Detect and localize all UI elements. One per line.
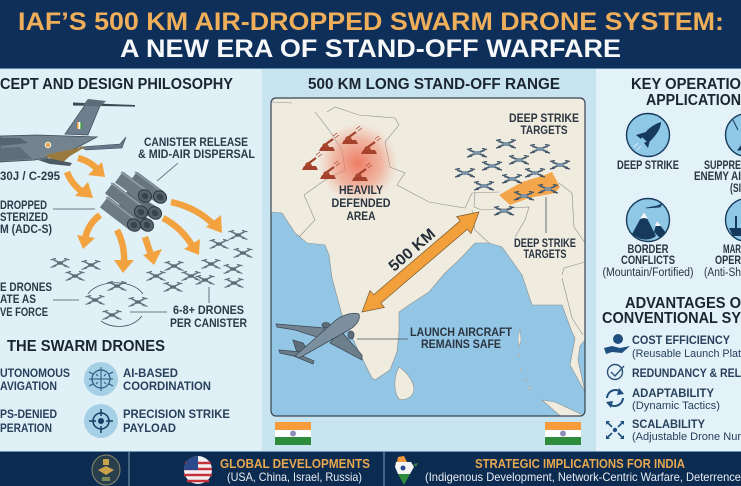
feature text: precision strike payload: PAYLOAD bbox=[123, 421, 176, 435]
target region bbox=[499, 172, 560, 205]
label: border conflicts bbox=[602, 244, 694, 279]
label: launch aircraft remains safe bbox=[410, 327, 512, 351]
drone swarm bbox=[50, 230, 252, 326]
icon: indian flag left bbox=[275, 422, 311, 445]
label: deep strike targets upper: TARGETS bbox=[520, 125, 568, 137]
title line two: A NEW ERA OF STAND-OFF WARFARE bbox=[120, 35, 621, 63]
icon: cost efficiency hand and coin bbox=[604, 334, 630, 354]
advantage: adaptability: ADAPTABILITY bbox=[632, 386, 714, 400]
label: drones per canister bbox=[170, 303, 247, 330]
label: canister release: & MID-AIR DISPERSAL bbox=[138, 147, 255, 161]
panel: stand-off range map bbox=[271, 76, 585, 445]
feature: autonomous navigation bbox=[0, 366, 70, 393]
label: deep strike: DEEP STRIKE bbox=[617, 160, 679, 172]
label: air-dropped canisterized system: DROPPED bbox=[0, 198, 47, 212]
text: global developments bbox=[220, 456, 370, 484]
label: aircraft: 30J / C-295 bbox=[0, 169, 60, 183]
label: canister release: CANISTER RELEASE bbox=[144, 135, 248, 149]
feature: gps-denied operation bbox=[0, 407, 57, 435]
footer bar bbox=[0, 451, 741, 486]
feature: autonomous navigation: AVIGATION bbox=[0, 379, 57, 393]
panel: key operational applications bbox=[602, 76, 741, 443]
label: maritime operations bbox=[704, 244, 741, 279]
icon: india map in tricolor bbox=[395, 456, 418, 485]
arrow: 500 km range bbox=[362, 212, 479, 312]
text: global developments: (USA, China, Israel, Russia) bbox=[227, 470, 362, 484]
advantage: cost efficiency: COST EFFICIENCY bbox=[632, 333, 730, 347]
label: deep strike targets lower: DEEP STRIKE bbox=[514, 238, 576, 250]
label: drones operate as cohesive force bbox=[0, 280, 52, 319]
arrows: canister release and dispersal bbox=[67, 158, 222, 273]
label: deep strike targets lower bbox=[514, 238, 576, 261]
label: heavily defended area: HEAVILY bbox=[339, 185, 383, 197]
label: drones operate as cohesive force: E DRONES bbox=[0, 280, 52, 294]
title line one: IAF’S 500 KM AIR-DROPPED SWARM DRONE SYSTEM: bbox=[18, 8, 724, 36]
text: strategic implications for india: STRATEGIC IMPLICATIONS FOR INDIA bbox=[475, 456, 686, 471]
icon: indian flag right bbox=[545, 422, 581, 445]
panel: concept and design philosophy bbox=[0, 76, 255, 438]
label: canister release bbox=[138, 135, 255, 161]
label: launch aircraft remains safe: LAUNCH AIRCRAFT bbox=[410, 327, 512, 339]
icon: launch aircraft bbox=[276, 313, 362, 364]
advantage: adaptability bbox=[632, 386, 720, 412]
target drones bbox=[455, 139, 570, 215]
label: deep strike targets upper bbox=[509, 113, 579, 137]
advantage: cost efficiency bbox=[632, 333, 741, 360]
feature: gps-denied operation: PERATION bbox=[0, 421, 52, 435]
icon: air force seal bbox=[92, 455, 120, 485]
label: air-dropped canisterized system: STERIZED bbox=[0, 210, 48, 224]
icon: precision crosshair bbox=[84, 404, 118, 438]
label: drones operate as cohesive force: VE FORCE bbox=[0, 305, 48, 319]
advantage: scalability: (Adjustable Drone Nur bbox=[632, 431, 741, 443]
label: air-dropped canisterized system bbox=[0, 198, 52, 236]
heading: concept: CEPT AND DESIGN PHILOSOPHY bbox=[0, 76, 234, 93]
advantage: adaptability: (Dynamic Tactics) bbox=[632, 400, 720, 412]
feature text: precision strike payload bbox=[123, 407, 230, 435]
label: 500 km: 500 KM bbox=[386, 226, 439, 275]
icon: adaptability cycle bbox=[606, 388, 624, 408]
icon: usa flag globe bbox=[184, 456, 212, 484]
text: strategic implications for india bbox=[425, 456, 741, 484]
advantage: scalability: SCALABILITY bbox=[632, 417, 705, 431]
feature text: ai-based coordination: AI-BASED bbox=[123, 366, 178, 380]
feature text: ai-based coordination: COORDINATION bbox=[123, 379, 211, 393]
advantage: cost efficiency: (Reusable Launch Plat bbox=[632, 348, 741, 360]
heading: key applications bbox=[631, 76, 741, 109]
heading: range: 500 KM LONG STAND-OFF RANGE bbox=[308, 76, 560, 93]
heading: advantages bbox=[602, 295, 741, 327]
advantage: scalability bbox=[632, 417, 741, 443]
icon: maritime operations ship bbox=[726, 198, 741, 242]
icon: deep strike rocket bbox=[626, 114, 670, 156]
feature: gps-denied operation: PS-DENIED bbox=[0, 407, 57, 421]
label: border conflicts: CONFLICTS bbox=[621, 255, 675, 267]
icon: redundancy check bbox=[608, 364, 624, 380]
header banner bbox=[0, 0, 741, 69]
text: global developments: GLOBAL DEVELOPMENTS bbox=[220, 456, 370, 471]
heading: the swarm drones: THE SWARM DRONES bbox=[7, 338, 165, 355]
feature text: precision strike payload: PRECISION STRIKE bbox=[123, 407, 230, 421]
label: air-dropped canisterized system: M (ADC-S) bbox=[0, 222, 52, 236]
label: heavily defended area: DEFENDED bbox=[332, 198, 390, 210]
label: suppression of enemy air defences bbox=[694, 160, 741, 195]
feature: autonomous navigation: UTONOMOUS bbox=[0, 366, 70, 380]
icon: transport aircraft bbox=[0, 99, 135, 166]
label: drones operate as cohesive force: ATE AS bbox=[0, 292, 36, 306]
map bbox=[271, 98, 585, 420]
heavily defended area glow and launchers bbox=[302, 123, 398, 203]
label: heavily defended area: AREA bbox=[346, 211, 376, 223]
label: drones per canister: PER CANISTER bbox=[170, 316, 247, 330]
label: border conflicts: (Mountain/Fortified) bbox=[602, 267, 694, 279]
label: deep strike targets upper: DEEP STRIKE bbox=[509, 113, 579, 125]
label: heavily defended area bbox=[332, 185, 390, 223]
label: border conflicts: BORDER bbox=[628, 244, 669, 256]
label: launch aircraft remains safe: REMAINS SAFE bbox=[421, 339, 501, 351]
label: drones per canister: 6-8+ DRONES bbox=[173, 303, 244, 317]
feature text: ai-based coordination bbox=[123, 366, 211, 393]
label: deep strike targets lower: TARGETS bbox=[524, 249, 567, 261]
icon: scalability arrows bbox=[606, 421, 624, 439]
icon: suppression of air defences bbox=[726, 114, 741, 156]
icon: ai chip brain bbox=[84, 362, 118, 396]
icon: canister cluster bbox=[104, 172, 169, 234]
icon: border conflicts mountains bbox=[626, 198, 670, 242]
